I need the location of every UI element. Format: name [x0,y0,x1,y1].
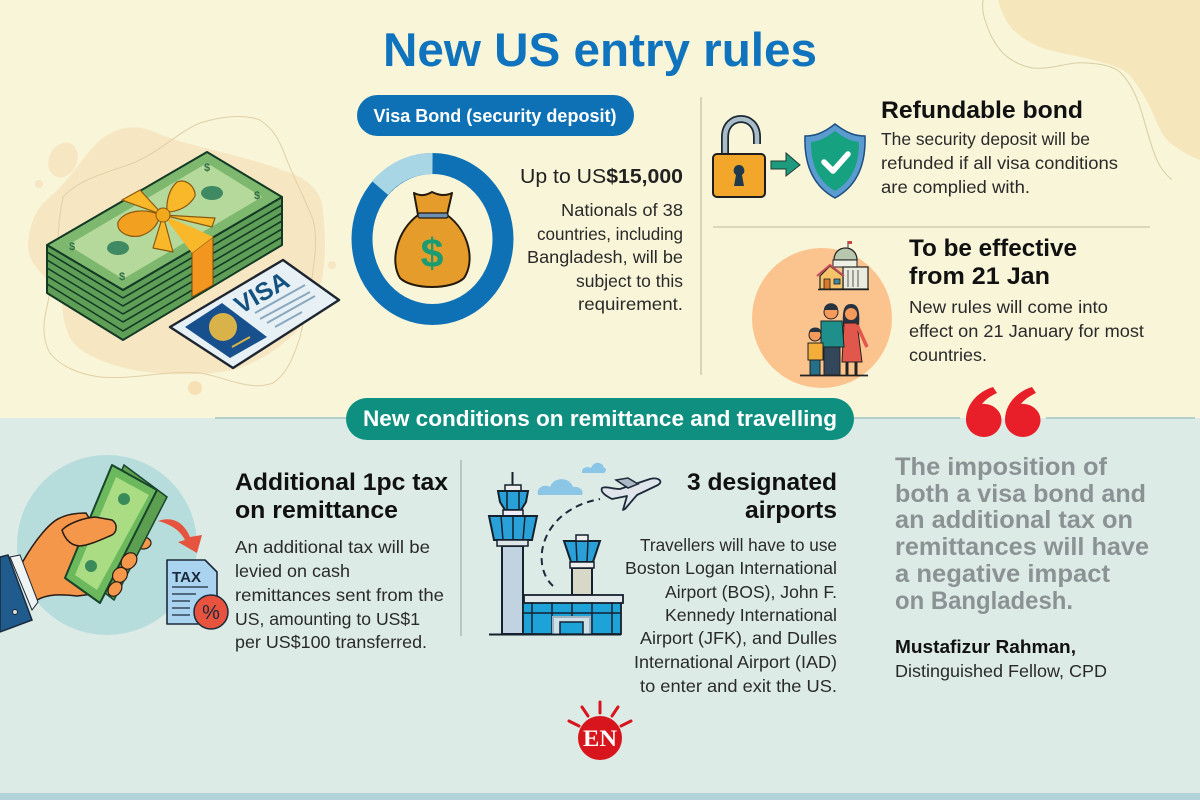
text: remittance tax: An additional tax will be [235,537,430,557]
plane [602,478,660,510]
money stack sides [47,197,282,340]
corner dollar signs: $ [119,271,125,283]
text: bond amount: countries, including [537,224,683,244]
child [809,329,821,341]
corner dollar signs: $ [69,241,75,253]
text: effective date: countries. [909,345,987,365]
text: remittance tax [235,469,449,652]
icon: hand with cash and tax document [0,455,228,635]
man [824,305,838,319]
quote text: an additional tax on [895,506,1133,534]
sleeve [0,555,32,632]
corner dollar signs: $ [254,190,260,202]
text: effective date: To be effective [909,235,1077,262]
quote text: The imposition of [895,453,1108,481]
visa card [170,260,339,368]
ribbon bow tails [122,190,215,252]
text: bond amount: Nationals of 38 [561,200,683,220]
text: bond amount [520,166,683,314]
woman [843,304,859,327]
text: bond amount: subject to this [576,271,683,291]
icon: family and buildings on peach circle [752,241,892,388]
fingers [118,550,140,572]
quote text: a negative impact [895,560,1111,588]
finger behind notes [135,537,151,549]
text: designated airports: airports [745,497,837,524]
quote attribution: Mustafizur Rahman, [895,637,1076,657]
short tower [572,568,592,595]
logo: EN sun: EN [583,726,617,751]
visa word: VISA [230,266,294,320]
ribbon bow loops [118,211,160,236]
text: designated airports [625,469,837,696]
pill: visa bond heading [357,95,634,136]
text: remittance tax: levied on cash [235,561,350,581]
text: refundable bond: refunded if all visa conditions [881,153,1118,173]
quote text: both a visa bond and [895,480,1146,508]
text: remittance tax: remittances sent from the [235,585,444,605]
quote text [895,453,1149,615]
icon: open padlock, arrow and shield [713,119,865,198]
passport [185,303,267,358]
text: effective date: effect on 21 January for most [909,321,1144,341]
red arrow [158,519,202,553]
text: remittance tax: US, amounting to US$1 [235,609,420,629]
background: pale teal lower section [0,418,1200,800]
capitol [847,241,849,250]
tall tower [502,546,523,634]
text: remittance tax: Additional 1pc tax [235,469,449,496]
icon: money bag [395,192,470,287]
icon: hand with cash and tax document: TAX [172,569,201,586]
text: refundable bond: The security deposit will be [881,129,1090,149]
text: effective date: New rules will come into [909,297,1108,317]
text: remittance tax: per US$100 transferred. [235,632,427,652]
tax document [167,560,217,624]
icon: airport towers, clouds and plane [489,463,660,634]
title: New US entry rules [383,23,817,76]
logo: EN sun [569,702,631,760]
ribbon strap [192,237,213,297]
decorative blob top right [998,0,1200,160]
illustration: money stack with ribbon and visa card [28,116,339,395]
thumb [62,517,116,546]
text: bond amount: requirement. [578,294,683,314]
banknotes [78,465,167,600]
text: bond amount: Up to US $15,000 [520,166,683,188]
pill: remittance and travelling heading: New conditions on remittance and travelling [363,406,837,431]
text: designated airports: Boston Logan International [625,558,837,578]
palm [22,513,115,600]
text: remittance tax: on remittance [235,497,398,524]
text: effective date [909,235,1144,365]
background: bottom strip [0,793,1200,800]
text: designated airports: Airport (BOS), John F. [665,582,837,602]
pill: visa bond heading: Visa Bond (security deposit) [374,106,617,126]
quote attribution [895,637,1107,681]
clouds [538,479,583,495]
text: refundable bond: are complied with. [881,177,1030,197]
icon: red quotation marks [966,387,1040,437]
quote text: remittances will have [895,533,1149,561]
corner dollar signs: $ [204,162,210,174]
text: designated airports: Travellers will have to use [640,535,837,555]
corner dollar signs [69,162,260,283]
text: refundable bond: Refundable bond [881,97,1083,124]
text: designated airports: 3 designated [687,469,837,496]
money stack top [47,152,282,290]
terminal [523,602,621,634]
text: refundable bond [881,97,1118,197]
text: designated airports: to enter and exit the US. [640,676,837,696]
text: bond amount: Bangladesh, will be [527,247,683,267]
text: designated airports: International Airport (IAD) [634,652,837,672]
text: effective date: from 21 Jan [909,263,1050,290]
pill: remittance and travelling heading [346,398,854,440]
flight path [542,499,600,586]
text: designated airports: Kennedy International [665,605,837,625]
icon: hand with cash and tax document: % [202,602,220,624]
quote attribution: Distinguished Fellow, CPD [895,661,1107,681]
house [820,266,843,289]
background blob [28,127,325,374]
text: designated airports: Airport (JFK), and Dulles [640,628,837,648]
donut with money bag [362,163,503,314]
icon: money bag: $ [421,230,444,276]
background: cream top section [0,0,1200,419]
quote text: on Bangladesh. [895,587,1073,615]
